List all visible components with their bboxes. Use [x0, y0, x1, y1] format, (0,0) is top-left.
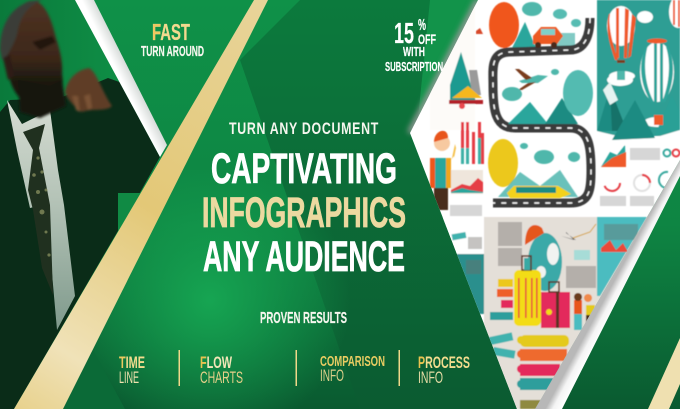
- item: time line: [119, 353, 145, 387]
- panel: infographic collage: [400, 0, 680, 409]
- clouds and forest: [502, 69, 578, 124]
- text: 15 percent off with subscription: 15: [394, 18, 414, 50]
- head: [0, 0, 66, 118]
- balloon top right: [669, 0, 680, 28]
- item: process info: INFO: [418, 368, 443, 387]
- banner list: [517, 335, 569, 409]
- heading: infographics: INFOGRAPHICS: [202, 189, 406, 237]
- small icons: [561, 224, 628, 260]
- area chart: [451, 170, 483, 194]
- yellow suitcase: [514, 256, 541, 326]
- white band beside infographic collage: [410, 0, 680, 409]
- item: process info: PROCESS: [418, 354, 470, 372]
- item: flow charts: [200, 353, 243, 387]
- shirt: [7, 100, 75, 330]
- pink suitcase: [541, 282, 570, 328]
- cartoon character: [430, 131, 456, 210]
- pill labels: [490, 279, 513, 320]
- item: flow charts: CHARTS: [200, 368, 243, 387]
- panel: man portrait on green: [0, 0, 170, 409]
- heading: any audience: ANY AUDIENCE: [203, 233, 405, 281]
- text: proven results: PROVEN RESULTS: [260, 310, 347, 327]
- heading: captivating: CAPTIVATING: [211, 145, 397, 193]
- text: 15 percent off with subscription: %: [418, 17, 426, 34]
- white diagonal stripe: [75, 0, 167, 157]
- map and landmark panel: [430, 0, 483, 130]
- balloon red: [607, 6, 636, 81]
- text: 15 percent off with subscription: [385, 17, 443, 74]
- heading: turn any document: TURN ANY DOCUMENT: [229, 120, 378, 139]
- text: 15 percent off with subscription: OFF: [418, 31, 436, 47]
- clouds lower: [520, 143, 580, 164]
- mountains: [597, 82, 680, 140]
- item: flow charts: FLOW: [200, 353, 233, 372]
- item: comparison info: [320, 354, 385, 385]
- text: fast turn around: [141, 19, 204, 60]
- text: 15 percent off with subscription: SUBSCRIPTION: [385, 60, 443, 74]
- hat: [525, 225, 544, 245]
- hand: [65, 68, 112, 112]
- suit: [0, 78, 160, 409]
- bar chart: [461, 122, 484, 164]
- text blocks: [466, 222, 638, 288]
- travel collage background: [442, 216, 647, 409]
- text: fast turn around: TURN AROUND: [141, 43, 204, 60]
- gold stripe bottom right: [648, 338, 680, 409]
- item: comparison info: COMPARISON: [320, 354, 385, 370]
- text: 15 percent off with subscription: WITH: [403, 45, 425, 59]
- ticket stack: [452, 232, 516, 359]
- teal balloon panel: [597, 0, 680, 136]
- circle callout yellow: [488, 139, 518, 187]
- lower right chart and gauges: [450, 145, 680, 216]
- item: process info: [418, 354, 470, 387]
- divider: [178, 350, 180, 386]
- scenery teal: [512, 2, 581, 48]
- globe: [528, 233, 562, 291]
- divider: [296, 350, 297, 386]
- item: comparison info: INFO: [320, 367, 344, 385]
- airplane: [515, 69, 548, 90]
- item: time line: LINE: [119, 368, 139, 387]
- cartoon travellers: [574, 293, 595, 330]
- tie: [23, 124, 53, 295]
- divider: [398, 350, 400, 386]
- gold diagonal stripe: [14, 0, 268, 409]
- circle callout teal: [563, 70, 593, 116]
- item: time line: TIME: [119, 353, 145, 372]
- orange car: [533, 27, 563, 48]
- balloon teal: [640, 38, 674, 125]
- text: fast turn around: FAST: [152, 19, 190, 45]
- clouds in teal panel: [597, 11, 680, 145]
- train: [498, 170, 578, 198]
- circle callout orange: [489, 2, 519, 48]
- road: [493, 18, 591, 203]
